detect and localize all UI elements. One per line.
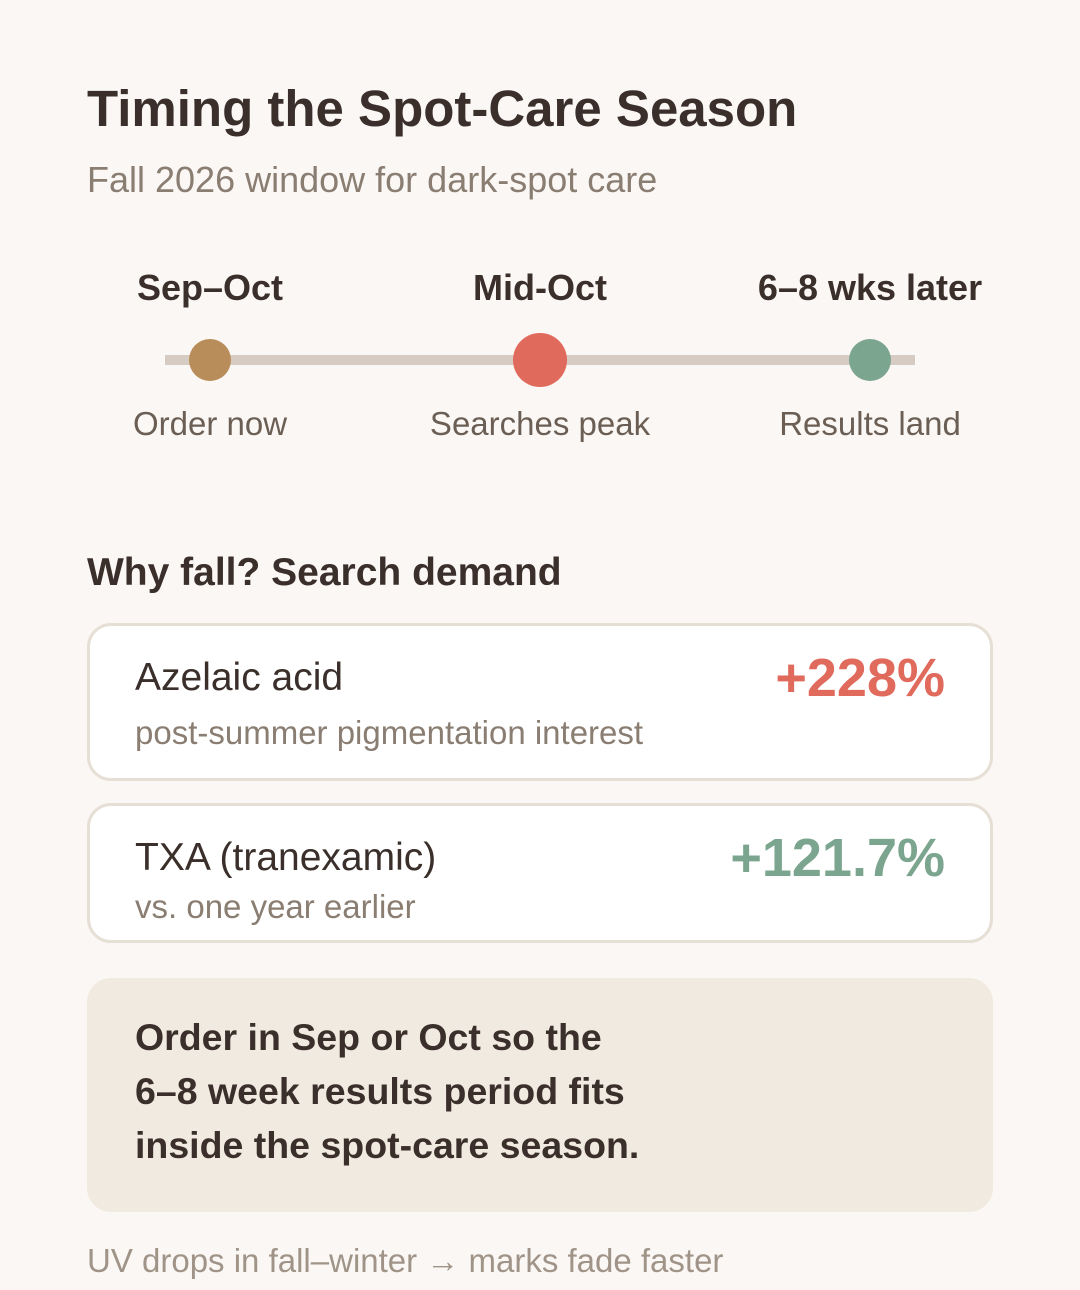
card value: +121.7% bbox=[730, 828, 945, 888]
label: Sep–Oct: Sep–Oct bbox=[137, 267, 283, 308]
caption: Results land: Results land bbox=[779, 405, 961, 442]
callout text: inside the spot-care season. bbox=[135, 1124, 639, 1166]
card name: Azelaic acid bbox=[135, 656, 343, 699]
caption: Order now: Order now bbox=[133, 405, 287, 442]
section heading: Why fall? Search demand bbox=[87, 551, 562, 594]
callout bbox=[87, 978, 993, 1212]
callout text: 6–8 week results period fits bbox=[135, 1070, 625, 1112]
card: azelaic acid bbox=[87, 623, 993, 781]
card name: TXA (tranexamic) bbox=[135, 836, 436, 879]
marker: order now bbox=[189, 339, 231, 381]
title: Timing the Spot-Care Season bbox=[87, 80, 797, 137]
card note: post-summer pigmentation interest bbox=[135, 714, 643, 751]
card: TXA bbox=[87, 803, 993, 943]
timeline bbox=[133, 267, 982, 442]
timeline track bbox=[165, 355, 915, 365]
label: Mid-Oct: Mid-Oct bbox=[473, 267, 607, 308]
card value: +228% bbox=[775, 648, 945, 708]
marker: results land bbox=[849, 339, 891, 381]
caption: Searches peak: Searches peak bbox=[430, 405, 650, 442]
subtitle: Fall 2026 window for dark-spot care bbox=[87, 159, 657, 200]
card note: vs. one year earlier bbox=[135, 888, 416, 925]
callout text bbox=[135, 1016, 639, 1166]
label: 6–8 wks later: 6–8 wks later bbox=[758, 267, 982, 308]
callout text: Order in Sep or Oct so the bbox=[135, 1016, 602, 1058]
footnote: UV drops in fall–winter → marks fade faster bbox=[87, 1242, 723, 1279]
marker: searches peak bbox=[513, 333, 567, 387]
